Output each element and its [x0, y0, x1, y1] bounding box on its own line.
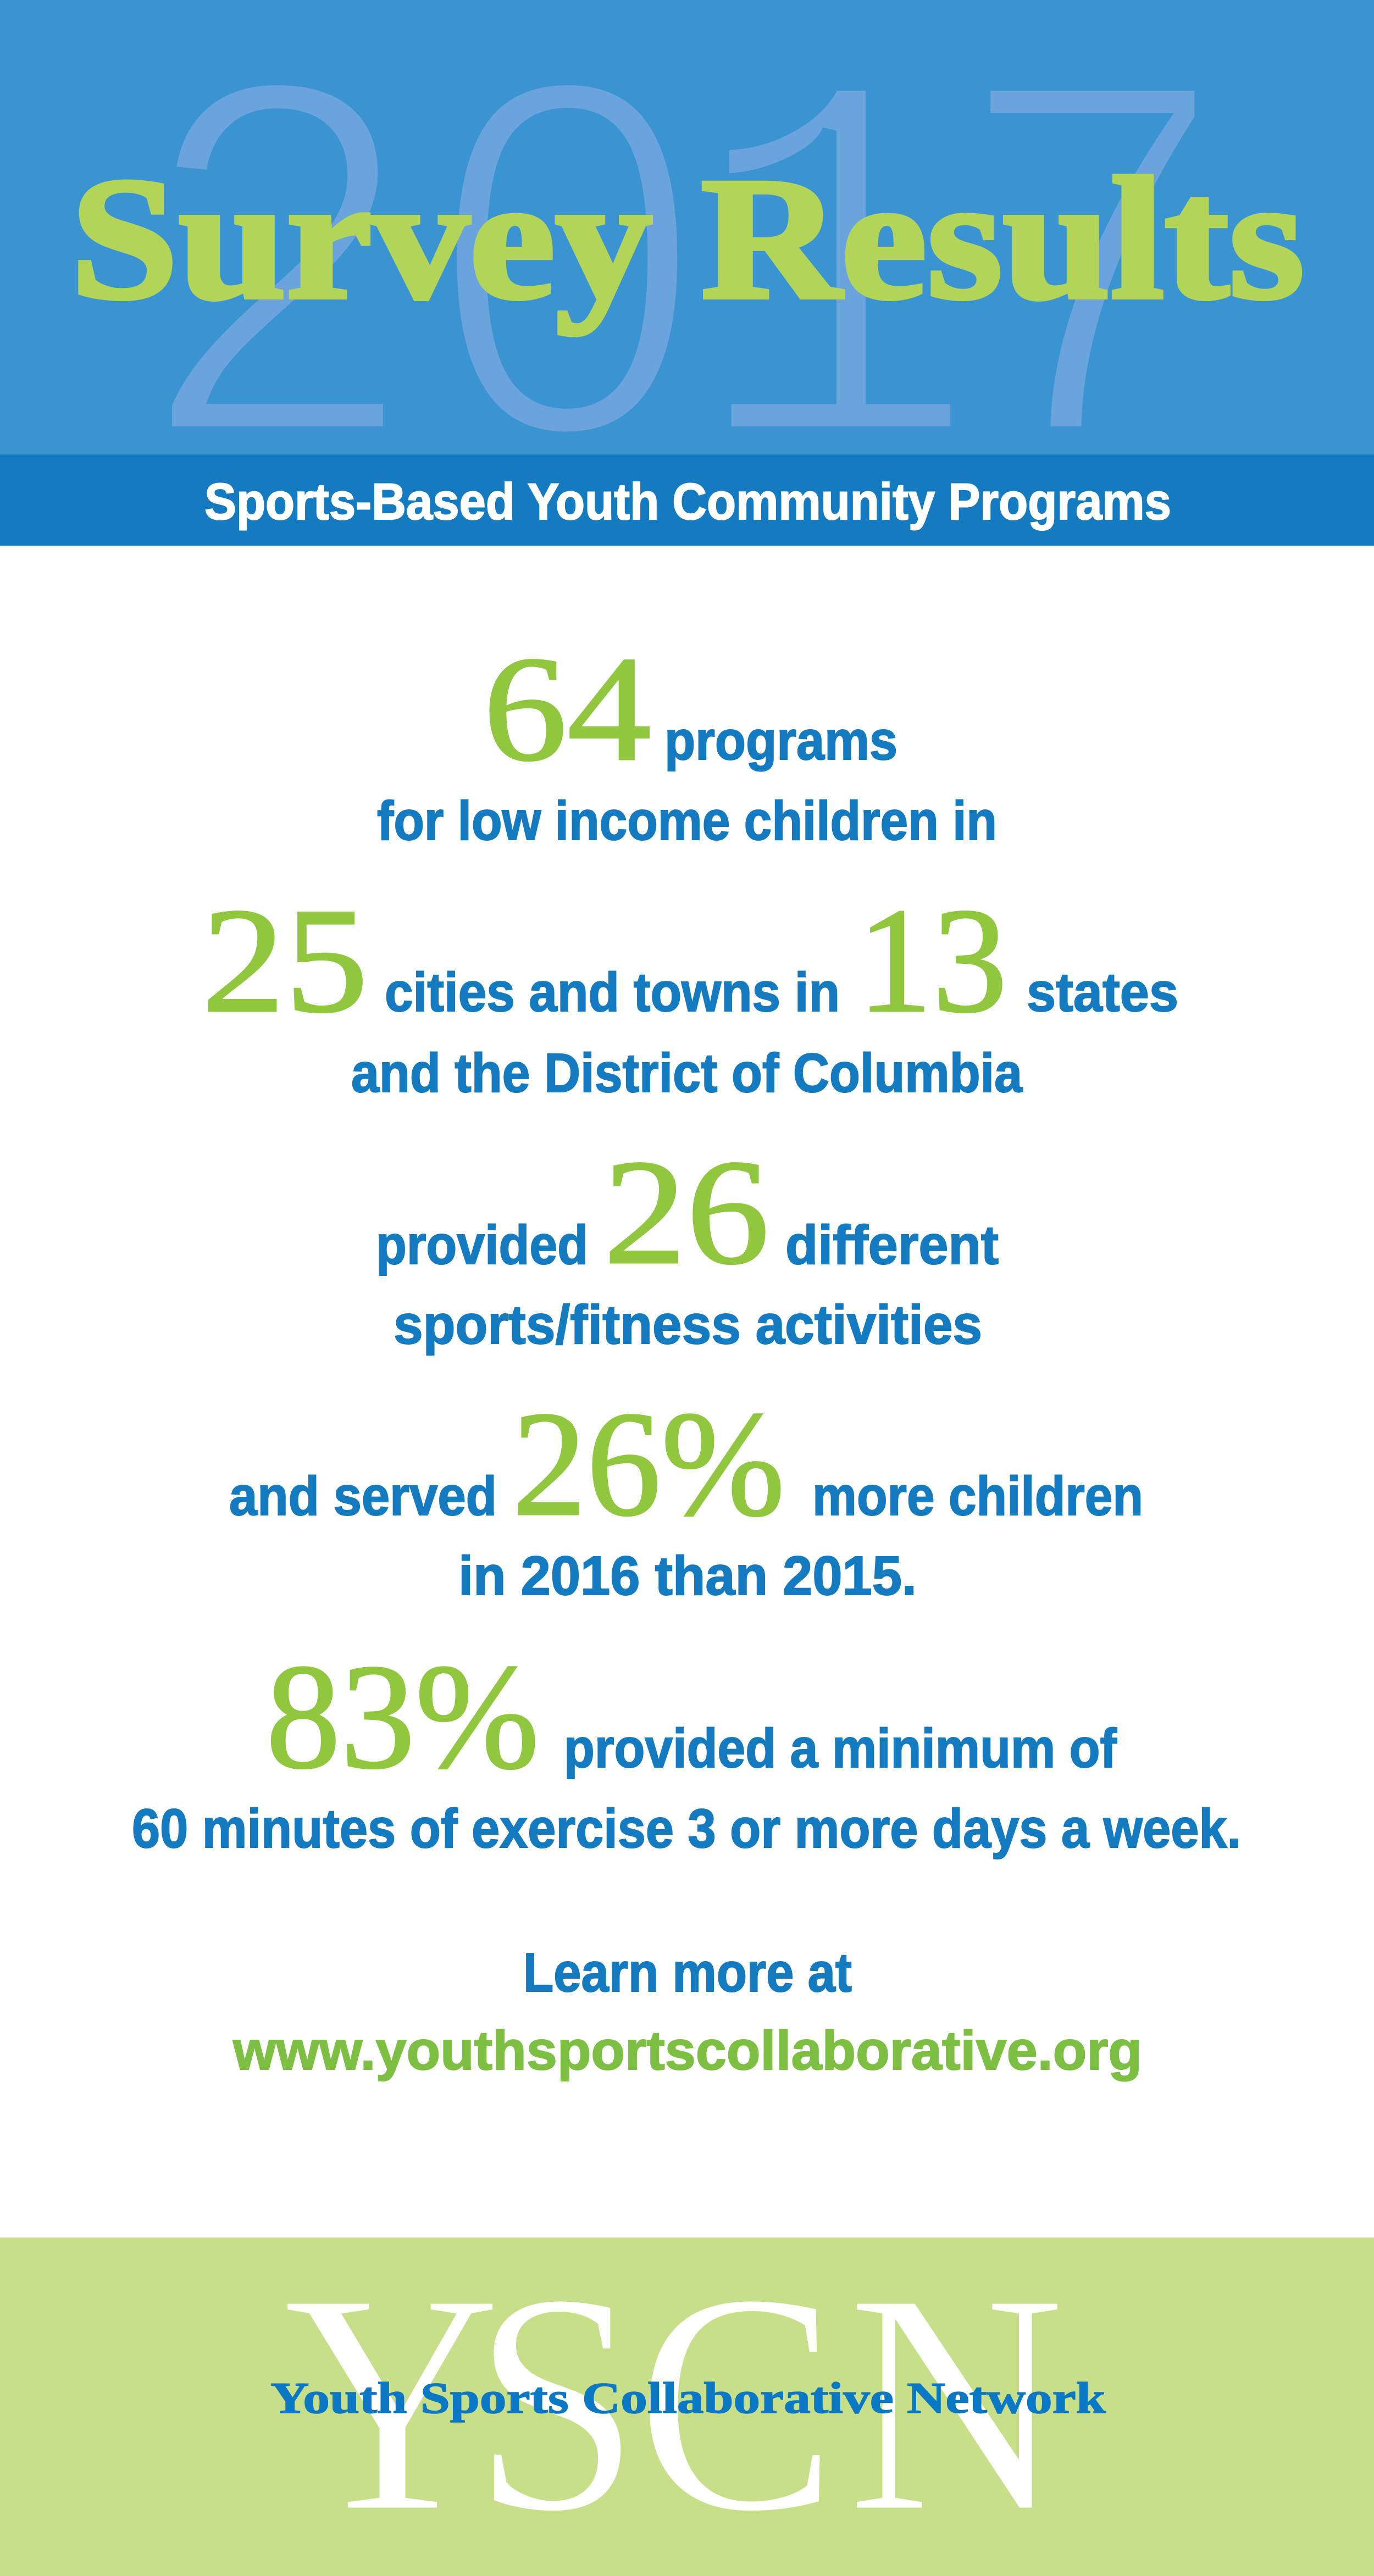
- statistic: 25 cities and 13 states: states: [1027, 962, 1178, 1023]
- statistic: 25 cities and 13 states: 25: [202, 878, 368, 1044]
- statistic: 26 activities: sports/fitness activities: [394, 1294, 982, 1356]
- call to action: Learn more at: [523, 1942, 852, 2003]
- statistic: 26 activities: [376, 1129, 999, 1356]
- call to action: [232, 1942, 1142, 2081]
- statistic: 26 activities: 26: [603, 1129, 769, 1296]
- statistic: 26 activities: provided: [376, 1214, 588, 1276]
- title: Survey Results: [70, 142, 1304, 336]
- statistic: 25 cities and 13 states: and the District of Columbia: [351, 1042, 1023, 1104]
- background year 2017: 2017: [130, 0, 1240, 594]
- statistic: 83% exercise: [132, 1633, 1241, 1859]
- statistic: 64 programs: programs: [664, 710, 897, 771]
- call to action: www.youthsportscollaborative.org: [232, 2020, 1142, 2081]
- statistic: 83% exercise: 60 minutes of exercise 3 or more days a week.: [132, 1798, 1241, 1859]
- organisation name: Youth Sports Collaborative Network: [270, 2374, 1106, 2423]
- background letters YSCN: YSCN: [283, 2228, 1066, 2576]
- statistic: 25 cities and 13 states: 13: [857, 878, 1007, 1044]
- statistic: 26% more children: more children: [812, 1465, 1143, 1527]
- statistic: 26% more children: [229, 1380, 1143, 1607]
- panel: subtitle band: [0, 454, 1374, 546]
- statistic: 26% more children: and served: [229, 1465, 497, 1527]
- statistic: 25 cities and 13 states: [202, 878, 1178, 1104]
- statistic: 64 programs: 64: [483, 625, 651, 792]
- subtitle: Sports-Based Youth Community Programs: [204, 473, 1171, 530]
- statistic: 25 cities and 13 states: cities and towns in: [385, 962, 840, 1023]
- statistic: 26% more children: 26%: [512, 1380, 785, 1547]
- statistic: 83% exercise: 83%: [266, 1633, 539, 1800]
- statistic: 64 programs: for low income children in: [377, 790, 997, 852]
- statistic: 64 programs: [377, 625, 997, 852]
- statistic: 83% exercise: provided a minimum of: [564, 1718, 1117, 1779]
- statistic: 26 activities: different: [785, 1214, 999, 1276]
- panel: footer: [0, 2228, 1374, 2576]
- panel: header: [0, 0, 1374, 594]
- statistic: 26% more children: in 2016 than 2015.: [458, 1545, 917, 1607]
